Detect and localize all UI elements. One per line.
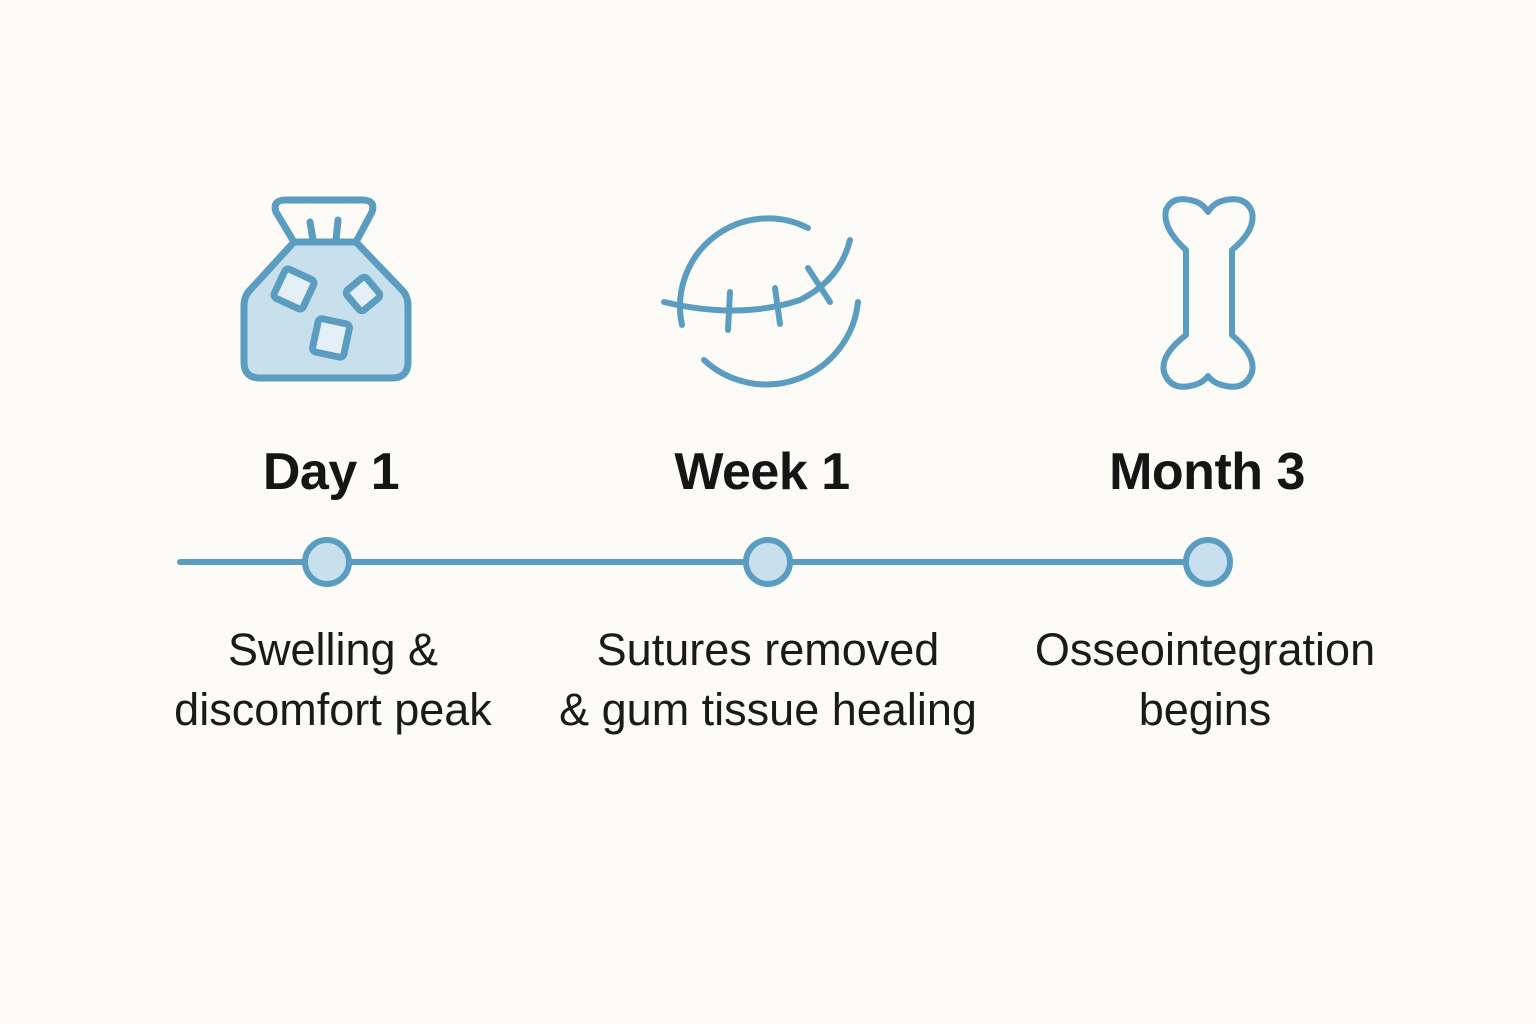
text: month 3: [1035, 624, 1375, 735]
heading: Week 1: Week 1: [674, 443, 850, 501]
text: day 1: Swelling &: [228, 624, 438, 675]
text: month 3: Osseointegration: [1035, 624, 1375, 675]
timeline node: month 3: [1186, 540, 1230, 584]
text: week 1: Sutures removed: [597, 624, 939, 675]
text: week 1: [559, 624, 977, 735]
heading: Month 3: Month 3: [1109, 443, 1305, 501]
text: week 1: & gum tissue healing: [559, 684, 977, 735]
icon: ice bag: [244, 200, 408, 378]
text: month 3: begins: [1139, 684, 1271, 735]
timeline line: [180, 559, 1208, 565]
icon: bone: [1163, 199, 1253, 387]
timeline node: week 1: [746, 540, 790, 584]
heading: Day 1: Day 1: [263, 443, 399, 501]
timeline node: day 1: [305, 540, 349, 584]
text: day 1: [174, 624, 492, 735]
icon: sutured wound: [664, 218, 858, 384]
text: day 1: discomfort peak: [174, 684, 492, 735]
